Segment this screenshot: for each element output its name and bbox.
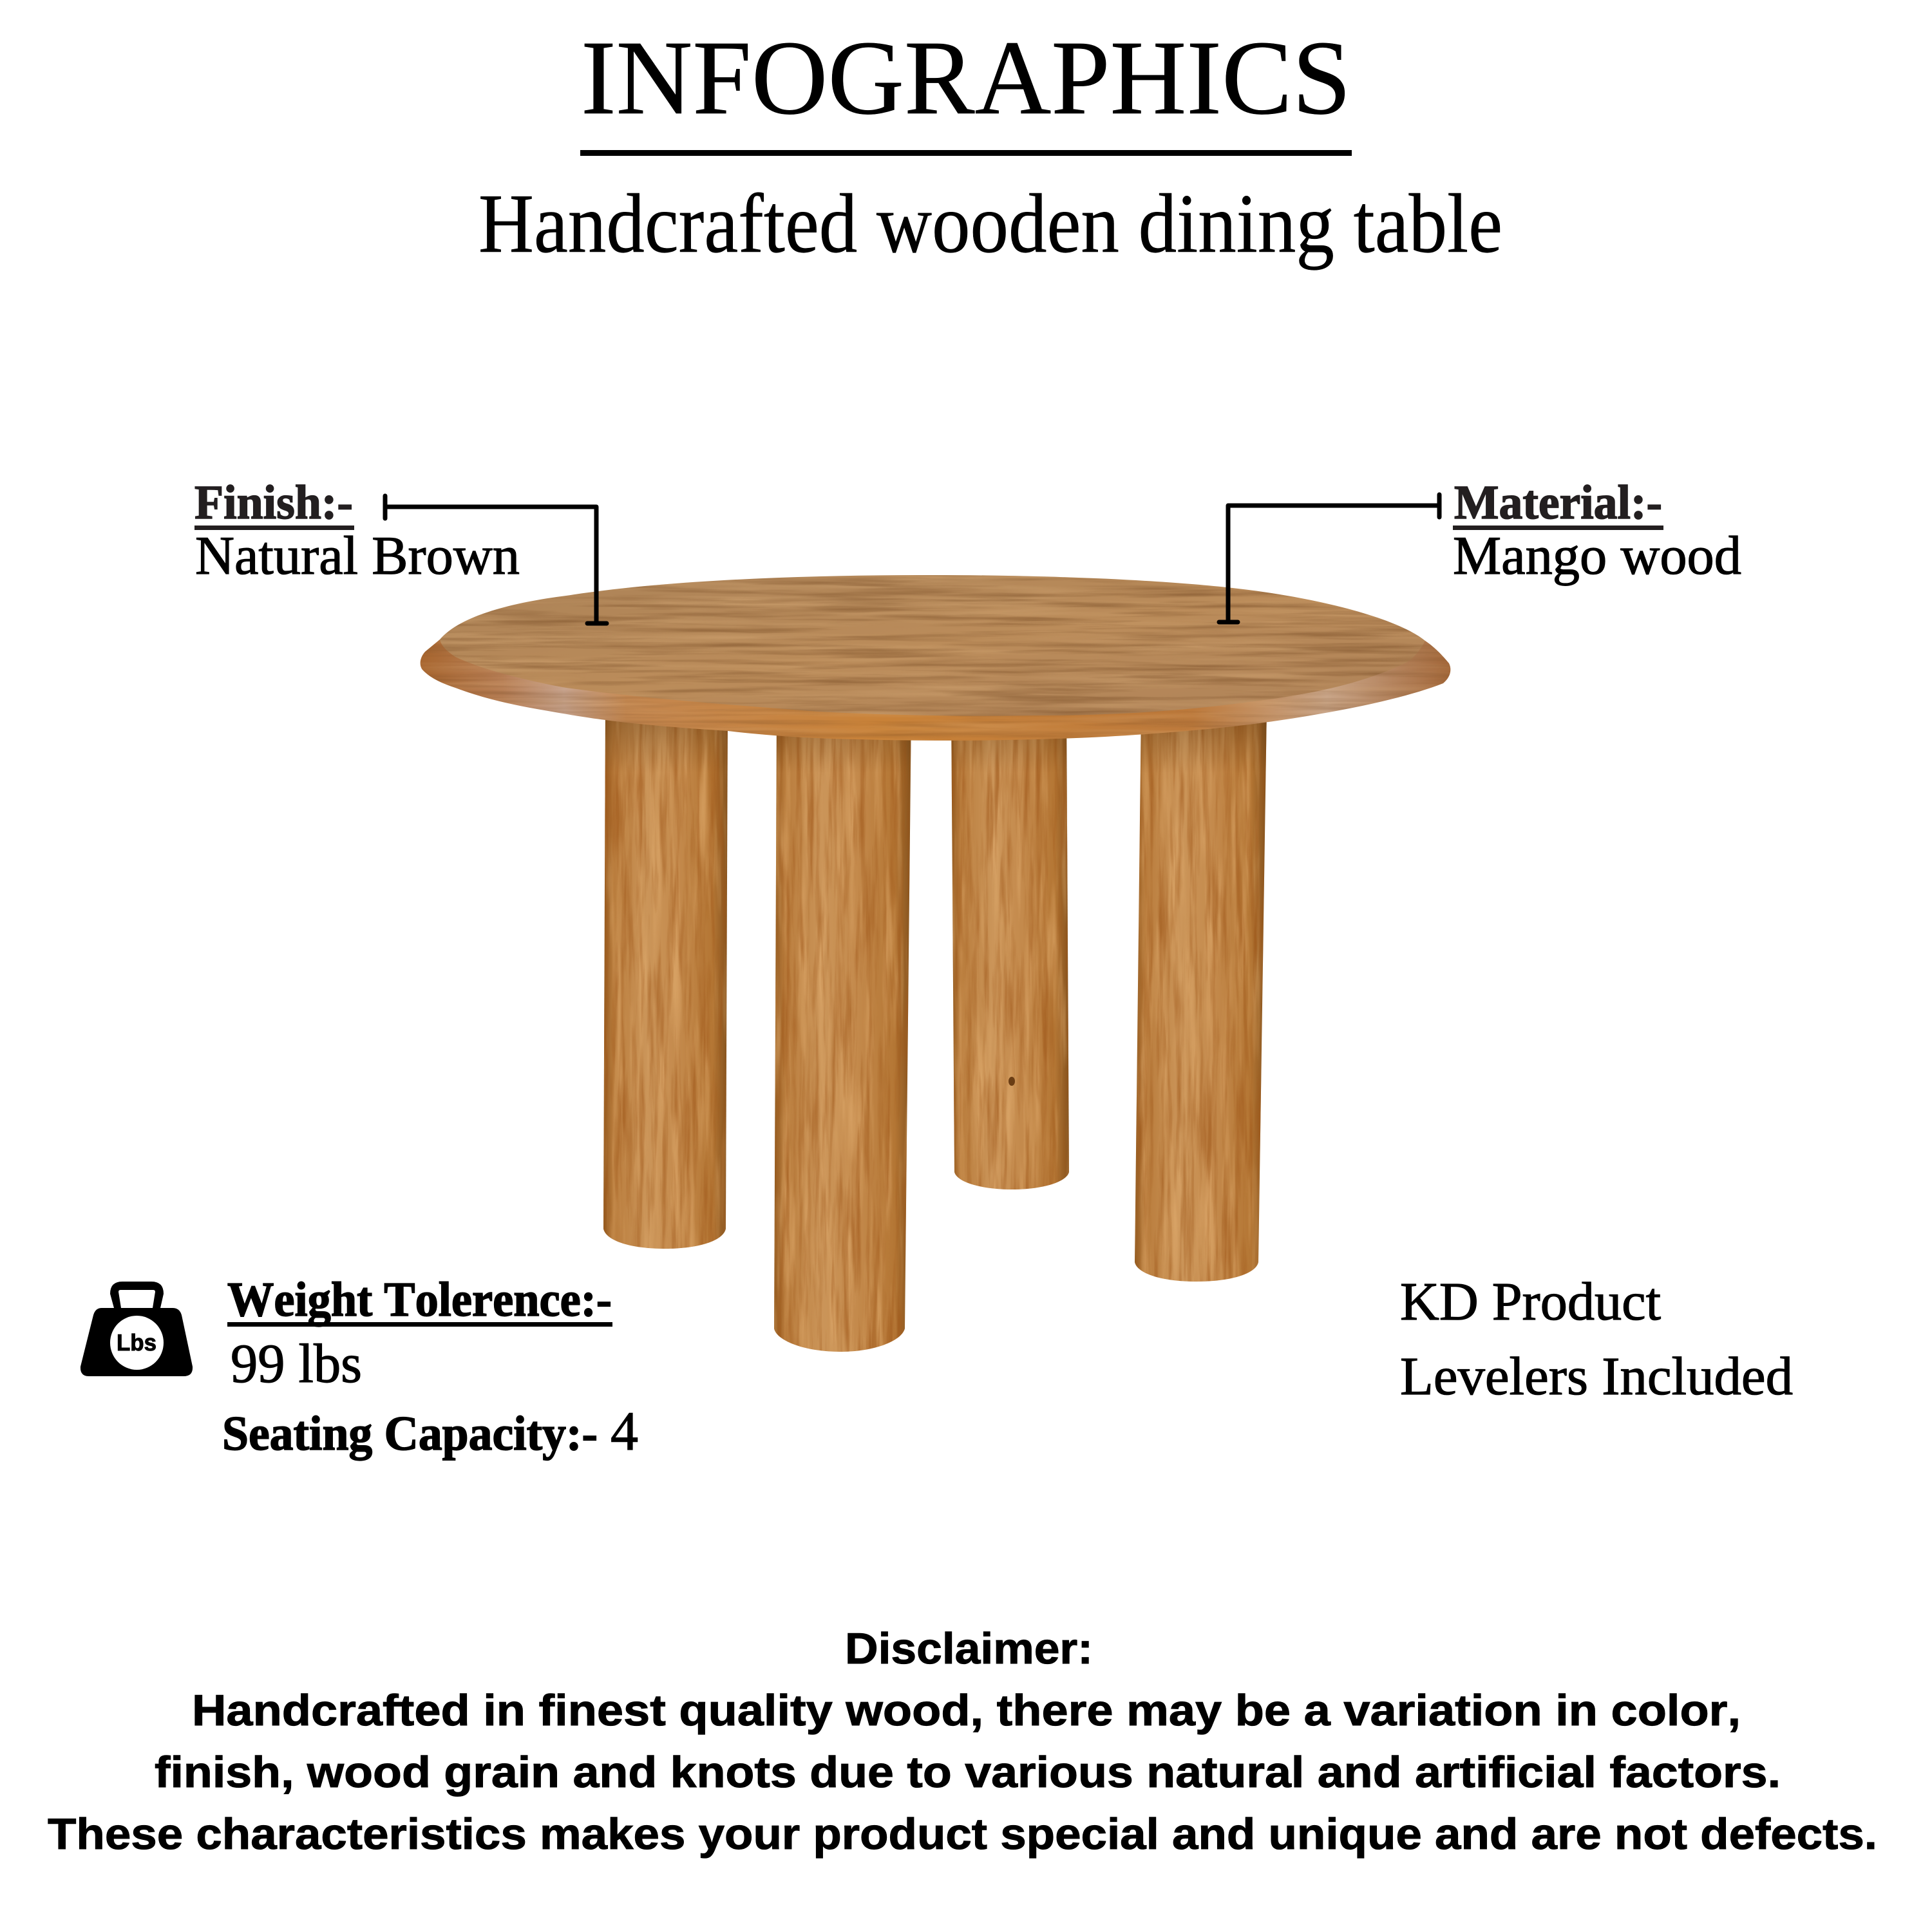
weight tolerance block [227, 1273, 612, 1394]
assembly notes: Levelers Included [1400, 1347, 1793, 1406]
disclaimer: Disclaimer: [845, 1624, 1093, 1673]
weight heading: Weight Tolerence:- [227, 1273, 612, 1327]
disclaimer: These characteristics makes your product special and unique and are not defects. [48, 1810, 1877, 1859]
material leader line [1219, 495, 1439, 622]
title underline [580, 150, 1352, 156]
wood knot on back leg [1009, 1077, 1015, 1086]
callout: material [1219, 476, 1741, 622]
disclaimer [48, 1624, 1877, 1859]
disclaimer: finish, wood grain and knots due to various natural and artificial factors. [155, 1748, 1781, 1797]
assembly notes: KD Product [1400, 1272, 1661, 1332]
finish heading underline [194, 526, 354, 530]
table leg: front right [1135, 708, 1267, 1282]
subtitle: Handcrafted wooden dining table [478, 177, 1502, 270]
assembly notes [1400, 1272, 1793, 1406]
table leg: back centre [951, 708, 1069, 1189]
table top wood grain [435, 573, 1430, 718]
seating capacity: 4 [611, 1400, 638, 1462]
table leg: back left [603, 708, 728, 1249]
icon: weight [80, 1282, 193, 1376]
leg wood grain [599, 708, 1275, 1365]
rim wood grain [415, 638, 1455, 744]
weight value: 99 lbs [231, 1332, 362, 1394]
disclaimer: Handcrafted in finest quality wood, there may be a variation in color, [192, 1686, 1741, 1735]
icon: weight: Lbs [117, 1329, 156, 1356]
product image: round wooden dining table [415, 573, 1455, 1365]
finish value: Natural Brown [195, 526, 520, 586]
table top surface [440, 575, 1425, 716]
weight heading underline [227, 1322, 612, 1327]
finish leader line [385, 496, 607, 623]
material heading underline [1453, 526, 1663, 530]
title: INFOGRAPHICS [581, 19, 1351, 137]
seating capacity: Seating Capacity:- [222, 1406, 598, 1461]
table leg: front left [774, 708, 911, 1352]
callout: finish [194, 476, 607, 623]
table top rim [421, 639, 1450, 741]
shadow under table top [605, 720, 1267, 762]
finish heading: Finish:- [194, 476, 353, 529]
material value: Mango wood [1453, 526, 1741, 586]
material heading: Material:- [1454, 476, 1662, 529]
